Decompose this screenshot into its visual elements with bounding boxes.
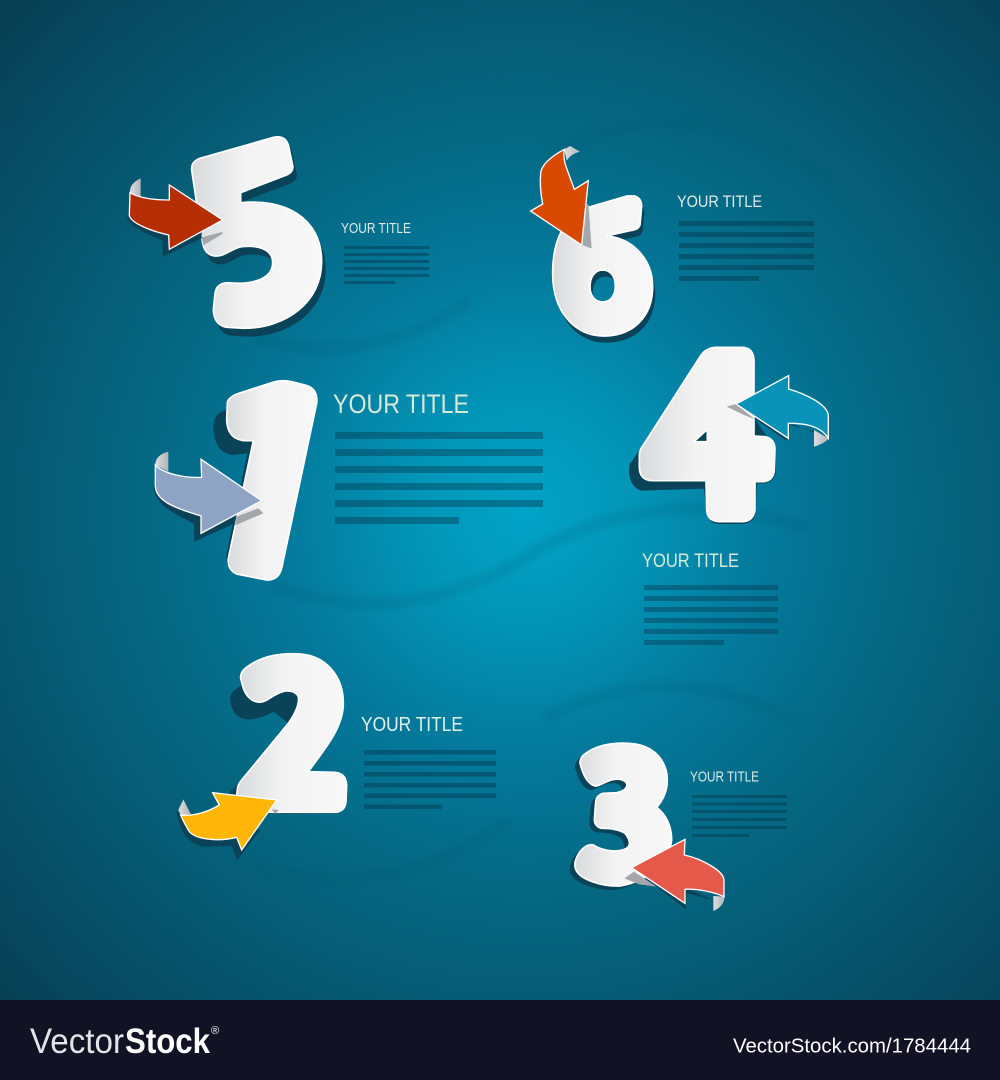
title 1: YOUR TITLE <box>333 389 469 419</box>
digit 4 <box>639 347 775 522</box>
item 6 <box>531 146 655 343</box>
item 5 <box>127 137 326 337</box>
item 2 <box>177 654 347 860</box>
item 3 <box>570 743 725 911</box>
text lines 6 <box>679 221 814 281</box>
digit 5 <box>192 137 322 328</box>
background swooshes <box>255 123 830 879</box>
title 5: YOUR TITLE <box>341 221 411 237</box>
text lines 2 <box>364 750 496 809</box>
digit 2 <box>237 654 347 812</box>
title 3: YOUR TITLE <box>690 770 759 786</box>
arrow 5 <box>127 178 223 257</box>
digit 2 shadow <box>228 685 340 814</box>
digit 1 <box>227 381 317 580</box>
footer bar: Stock <box>125 1022 210 1061</box>
arrow 6 <box>531 146 592 248</box>
text block 4 <box>642 551 778 645</box>
digit 3 <box>575 743 672 886</box>
digit 3 shadow <box>570 747 667 890</box>
text block 1 <box>333 389 543 524</box>
digit 6 <box>553 196 653 336</box>
item 4 <box>629 347 828 524</box>
footer logo: Vector <box>30 1022 124 1061</box>
arrow 2 <box>177 793 279 860</box>
digit 1 shadow <box>213 410 253 572</box>
item 1 <box>153 381 317 580</box>
text lines 4 <box>644 585 778 645</box>
title 4: YOUR TITLE <box>642 551 739 572</box>
text lines 1 <box>335 432 543 524</box>
text block 6 <box>677 192 814 281</box>
footer bar: ® <box>211 1025 219 1037</box>
arrow 4 <box>727 376 828 447</box>
title 2: YOUR TITLE <box>361 713 463 736</box>
arrow 3 <box>624 839 725 911</box>
title 6: YOUR TITLE <box>677 192 762 211</box>
digit 5 shadow <box>196 145 326 337</box>
footer reference number: VectorStock.com/1784444 <box>733 1036 971 1058</box>
text lines 5 <box>344 246 429 284</box>
digit 6 shadow <box>555 203 655 343</box>
text block 5 <box>341 221 429 284</box>
text lines 3 <box>692 795 787 837</box>
digit 4 shadow <box>629 417 776 524</box>
text block 3 <box>690 770 787 837</box>
footer bar <box>0 1000 1000 1080</box>
text block 2 <box>361 713 496 809</box>
arrow 1 <box>153 452 263 542</box>
